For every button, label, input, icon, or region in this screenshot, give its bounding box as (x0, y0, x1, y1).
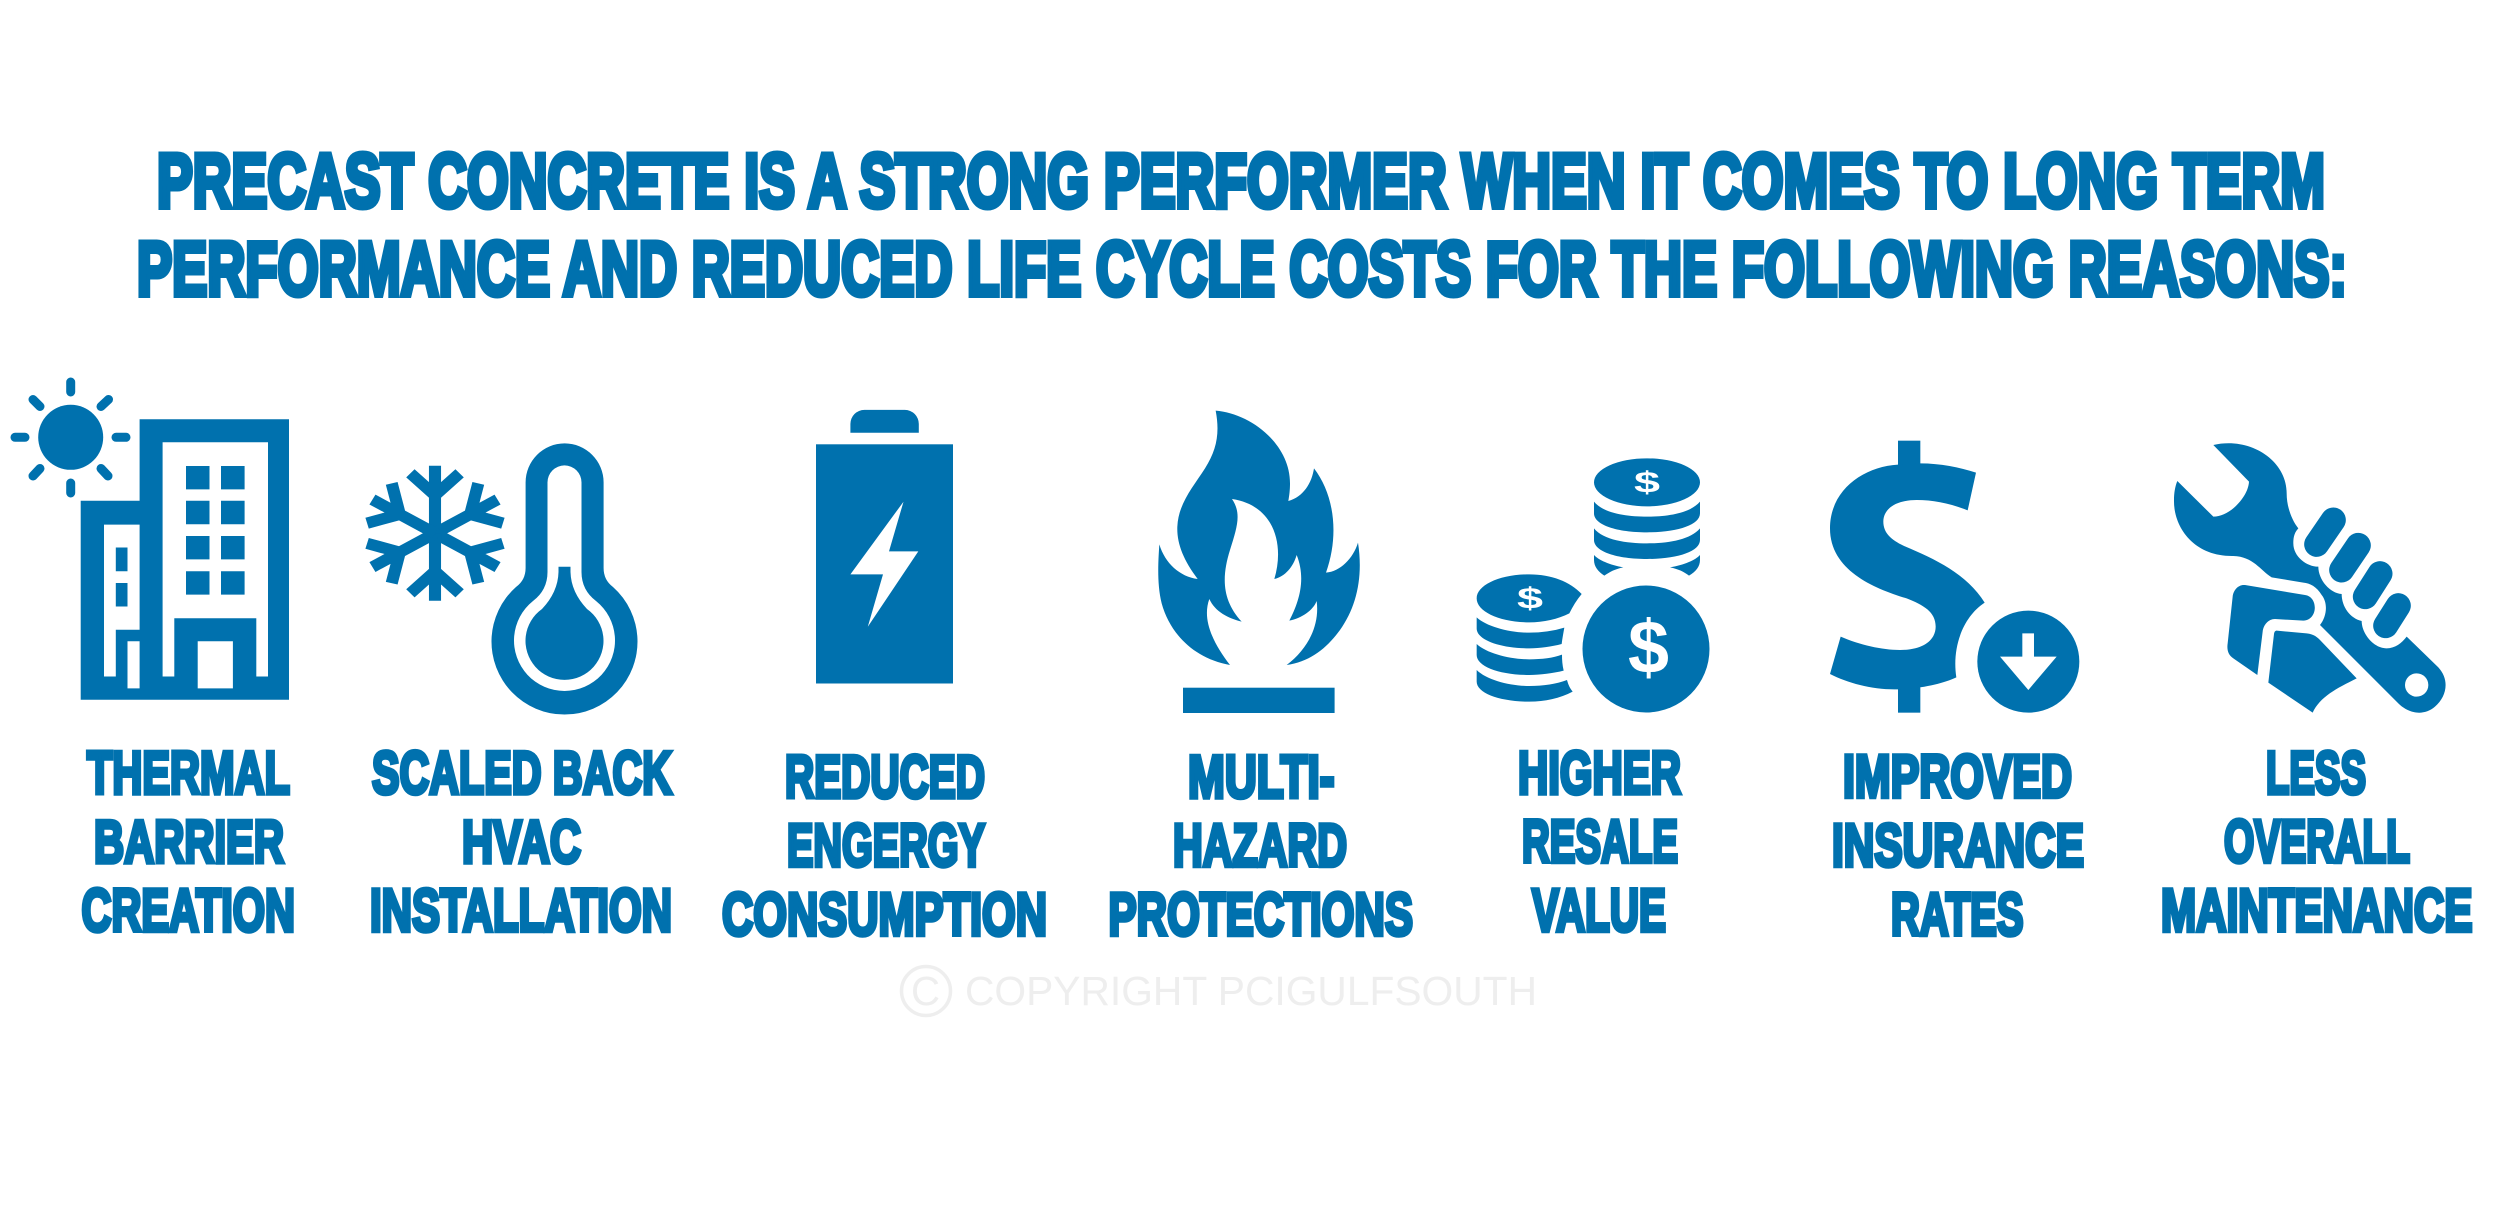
watermark: copyright: COPYRIGHT PCIGULFSOUTH (965, 968, 1537, 1014)
label: scaled back hvac installation: INSTALLATION (370, 877, 672, 944)
label: multi-hazard protections: PROTECTIONS (1108, 881, 1413, 948)
icon: coin stacks: $ (1634, 467, 1660, 500)
label: higher resale value: RESALE (1522, 808, 1678, 875)
icon: coin stacks (1477, 458, 1709, 712)
icon: flame (1158, 411, 1360, 713)
label: reduced energy consumption: ENGERGY (787, 812, 985, 879)
label: improved insurance rates: IMPROVED (1843, 743, 2072, 810)
label: less overall maintenance (2161, 740, 2472, 944)
label: thermal barrier creation: BARRIER (94, 808, 284, 876)
label: multi-hazard protections: HAZARD (1173, 812, 1347, 879)
label: thermal barrier creation: CREATION (82, 877, 295, 944)
icon: battery (816, 410, 953, 684)
label: scaled back hvac installation (370, 740, 672, 944)
label: thermal barrier creation: THERMAL (87, 740, 290, 806)
label: higher resale value: HIGHER (1518, 740, 1681, 806)
watermark: copyright: C (911, 968, 940, 1014)
label: improved insurance rates: RATES (1891, 881, 2024, 948)
label: improved insurance rates (1832, 743, 2084, 948)
label: reduced energy consumption (722, 744, 1047, 948)
label: less overall maintenance: LESS (2266, 740, 2366, 806)
label: multi-hazard protections (1108, 744, 1413, 948)
label: improved insurance rates: INSURANCE (1832, 812, 2084, 879)
icon: coin stacks: $ (1628, 605, 1669, 689)
label: higher resale value (1518, 740, 1681, 944)
label: multi-hazard protections: MULTI- (1188, 744, 1334, 810)
icon: coin stacks: $ (1517, 583, 1543, 616)
label: scaled back hvac installation: HVAC (462, 808, 581, 876)
label: higher resale value: VALUE (1532, 877, 1666, 944)
label: reduced energy consumption: CONSUMPTION (722, 881, 1047, 948)
label: reduced energy consumption: REDUCED (785, 744, 985, 810)
label: scaled back hvac installation: SCALED BACK (372, 740, 672, 806)
label: thermal barrier creation (82, 740, 295, 944)
icon: dollar sign with down arrow (1830, 441, 2079, 713)
title (137, 139, 2347, 312)
icon: building with sun (15, 382, 289, 700)
icon: snowflake and thermometer (360, 443, 637, 715)
icon: hand holding wrench (2174, 443, 2446, 713)
